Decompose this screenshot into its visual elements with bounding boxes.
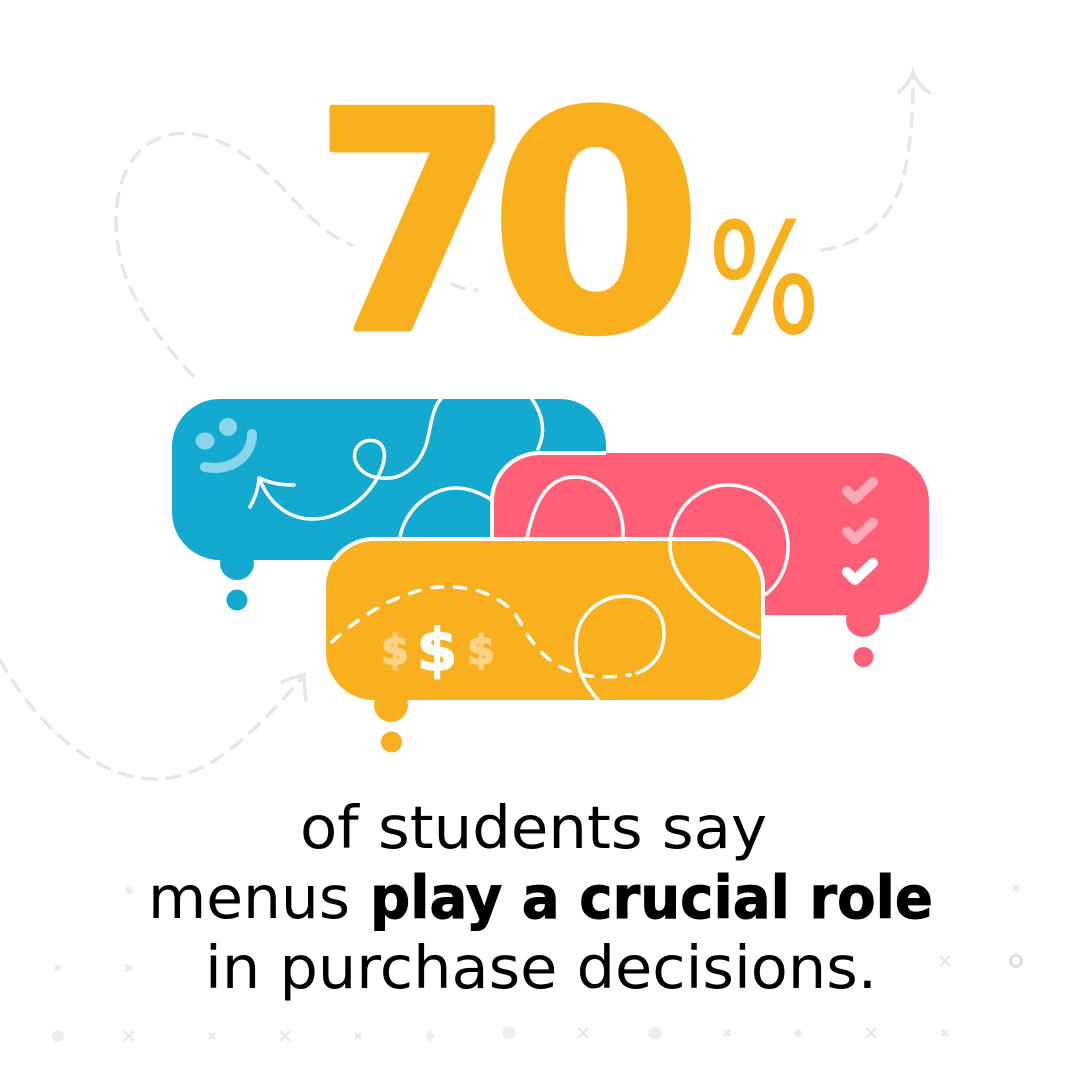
icon: checklist (847, 482, 873, 580)
panel: orange speech bubble (326, 485, 788, 752)
big number 70 percent (313, 48, 820, 401)
panel: blue speech bubble (172, 399, 606, 610)
caption text (148, 793, 933, 1002)
line crossing pink and orange bubbles (670, 485, 788, 638)
caption line 3: in purchase decisions. (205, 933, 877, 1002)
icon: smiley (196, 418, 252, 468)
caption line 1: of students say (300, 793, 767, 862)
percent sign: % (708, 191, 820, 368)
curved white line (527, 477, 623, 538)
dashed money path (332, 587, 630, 677)
dashed arrow: bottom left pointing right (0, 660, 306, 779)
icon: dollar signs (381, 616, 495, 684)
arrow: looped white line (250, 399, 543, 537)
panel: pink speech bubble (492, 453, 929, 667)
icon: dollar signs: $ (467, 628, 495, 674)
caption line 2: menus (148, 863, 350, 932)
dashed arrow: top left swoosh (116, 133, 477, 376)
digit 7: 7 (313, 48, 515, 401)
icon: dollar signs: $ (381, 628, 409, 674)
icon: dollar signs: $ (417, 616, 457, 684)
background dotted pattern (52, 885, 1022, 1042)
caption line 2 bold: play a crucial role (370, 863, 933, 932)
digit 0: 0 (490, 49, 702, 400)
orange loop line (576, 596, 664, 700)
dashed arrow: top right pointing up (822, 72, 930, 250)
